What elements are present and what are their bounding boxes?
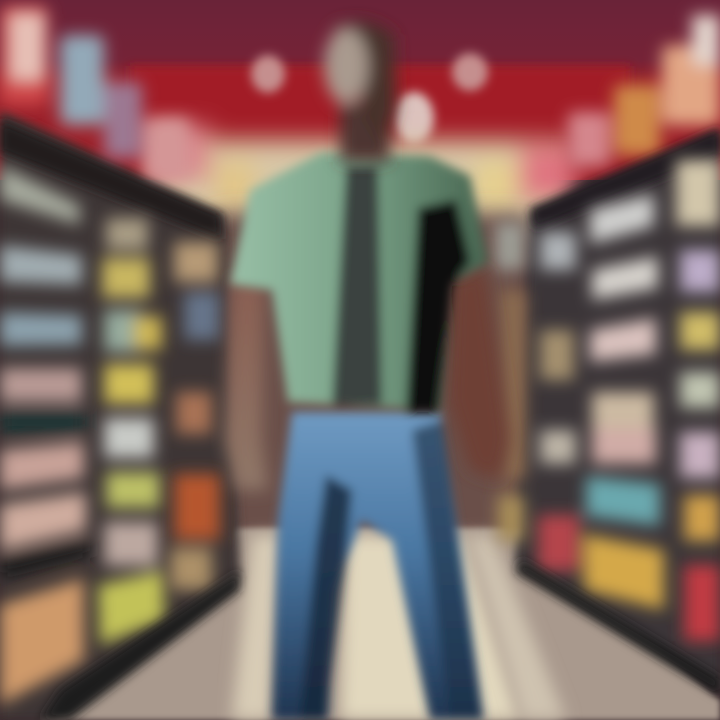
shirt [230, 152, 488, 412]
column 3 products [170, 242, 220, 590]
column 2 products [98, 218, 164, 645]
left arm [224, 280, 268, 490]
top products right [568, 15, 720, 166]
shelf base right [515, 558, 720, 696]
column 1 products [0, 165, 90, 705]
ceiling [0, 0, 720, 180]
jeans [272, 412, 484, 720]
left shelves [0, 5, 240, 720]
top products left [0, 5, 189, 180]
shelf edge left [0, 120, 222, 240]
neck and head [324, 22, 396, 162]
man [224, 22, 510, 720]
shelf edge right [530, 128, 720, 230]
floor [40, 528, 720, 720]
wall behind the figure [215, 215, 530, 545]
right arm [448, 268, 510, 480]
column products right [495, 160, 720, 641]
shelf base left [40, 570, 240, 720]
back wall of the store [150, 125, 575, 230]
